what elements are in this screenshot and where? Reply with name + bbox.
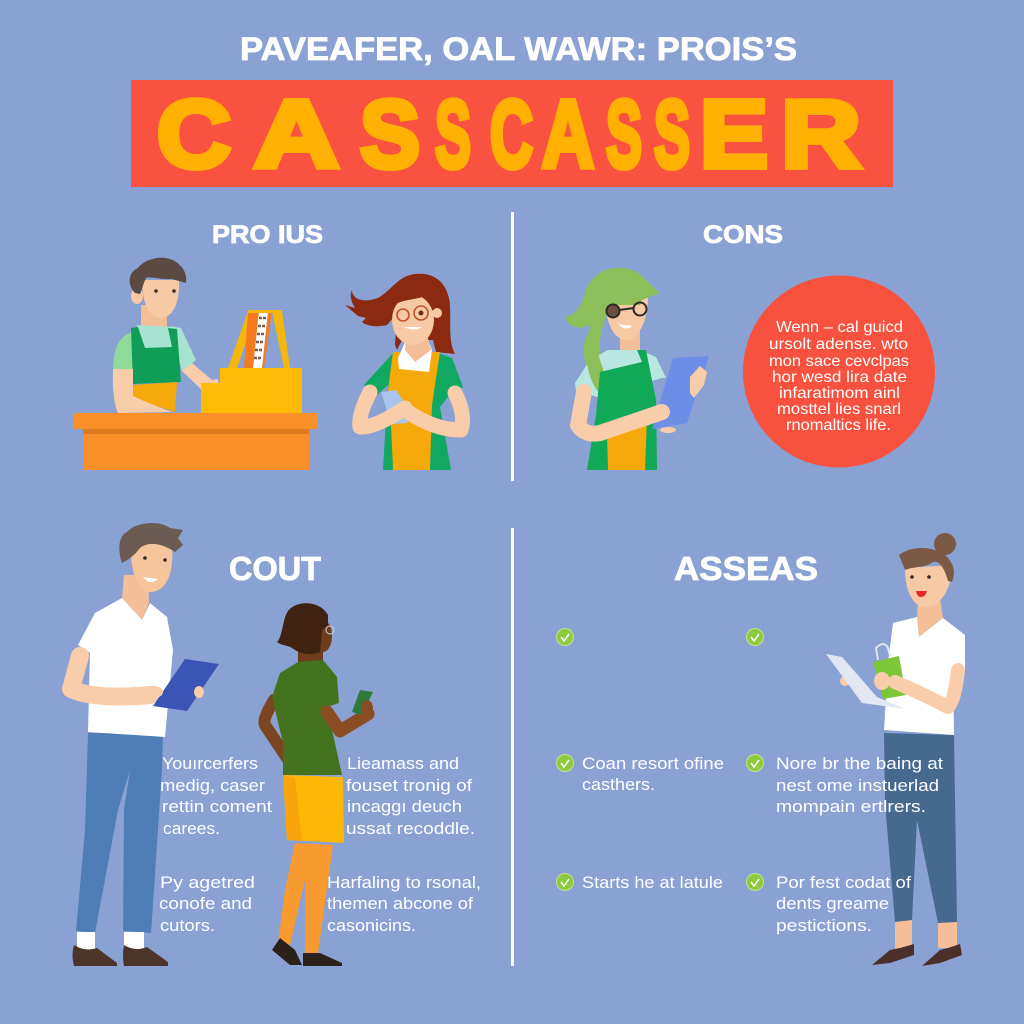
illustration: woman in green top seen from behind: [264, 603, 373, 966]
callout: red circle: mosttel lies snarl: [777, 401, 901, 418]
text block: cout column 1, item 2: [159, 873, 255, 935]
icon: check row 2 right: [746, 754, 764, 772]
callout: red circle: mon sace cevclpas: [769, 353, 909, 370]
text block: cout column 2, item 2: casonicins.: [327, 916, 416, 935]
icon: check row 3 right: [746, 874, 764, 890]
title banner: E: [700, 81, 768, 188]
title banner: A: [254, 81, 339, 188]
text block: cout column 2, item 1: fouset tronig of: [346, 776, 472, 795]
callout: red circle: infaratimom ainl: [779, 385, 900, 402]
title banner: S: [654, 81, 690, 188]
icon: check row 3 left: [556, 874, 574, 890]
title banner: S: [606, 81, 642, 188]
title banner: S: [435, 81, 471, 188]
title banner: C: [490, 81, 533, 188]
text block: cout column 2, item 2: [327, 873, 481, 935]
text block: cout column 1, item 2: conofe and: [159, 894, 252, 913]
title banner: [131, 80, 893, 188]
callout: red circle: [743, 276, 935, 468]
heading: pro ius: PRO IUS: [212, 221, 323, 249]
text block: asseas row 2 left: casthers.: [582, 775, 655, 794]
text block: cout column 2, item 1: [346, 754, 475, 838]
icon: check row 1 left: [556, 628, 574, 646]
text block: cout column 1, item 1: Youırcerfers: [162, 754, 258, 773]
text block: asseas row 3 right: [776, 873, 911, 935]
text block: asseas row 2 left: [582, 754, 724, 794]
icon: check row 1 right: [746, 628, 764, 646]
text block: cout column 2, item 1: incaggı deuch: [347, 797, 462, 816]
text block: cout column 1, item 2: Py agetred: [160, 873, 255, 892]
heading: cons: CONS: [703, 221, 783, 249]
title banner: A: [542, 81, 594, 188]
illustration: cashier at counter: [74, 258, 318, 470]
illustration: green-haired woman with clipboard: [565, 268, 709, 470]
heading: cout: COUT: [229, 550, 321, 587]
text block: cout column 2, item 1: ussat recoddle.: [346, 819, 475, 838]
text block: asseas row 2 right: Nore br the baing at: [776, 754, 943, 773]
text block: cout column 2, item 2: themen abcone of: [327, 894, 473, 913]
text block: cout column 1, item 2: cutors.: [160, 916, 215, 935]
text block: asseas row 2 right: mompain ertlrers.: [776, 797, 926, 816]
callout: red circle: Wenn – cal guicd: [776, 319, 903, 336]
title: subtitle line: PAVEAFER, OAL WAWR: PROIS’S: [240, 31, 797, 67]
title banner: S: [360, 81, 420, 188]
text block: asseas row 2 right: nest ome instuerlad: [776, 776, 939, 795]
heading: asseas: ASSEAS: [674, 550, 818, 587]
text block: cout column 1, item 1: carees.: [163, 819, 220, 838]
title banner: C: [157, 81, 231, 188]
text block: asseas row 3 right: Por fest codat of: [776, 873, 911, 892]
text block: asseas row 3 right: pestictions.: [776, 916, 872, 935]
text block: asseas row 3 left: Starts he at latule: [582, 873, 723, 892]
text block: cout column 1, item 1: rettin coment: [162, 797, 272, 816]
icon: check row 2 left: [556, 754, 574, 772]
callout: red circle: rnomaltics life.: [786, 417, 891, 434]
text block: cout column 2, item 2: Harfaling to rsonal,: [327, 873, 481, 892]
illustration: man with blue tablet: [71, 523, 219, 966]
text block: cout column 1, item 1: medig, caser: [160, 776, 265, 795]
text block: asseas row 2 left: Coan resort ofine: [582, 754, 724, 773]
callout: red circle: ursolt adense. wto: [769, 336, 908, 353]
text block: cout column 1, item 1: [160, 754, 272, 838]
text block: asseas row 3 right: dents greame: [776, 894, 889, 913]
illustration: red-haired woman with phone: [345, 274, 463, 470]
text block: asseas row 2 right: [776, 754, 943, 816]
callout: red circle: hor wesd lira date: [772, 369, 907, 386]
illustration: woman with bun, paper and green bag: [826, 533, 965, 966]
text block: cout column 2, item 1: Lieamass and: [347, 754, 459, 773]
title banner: R: [781, 81, 861, 188]
